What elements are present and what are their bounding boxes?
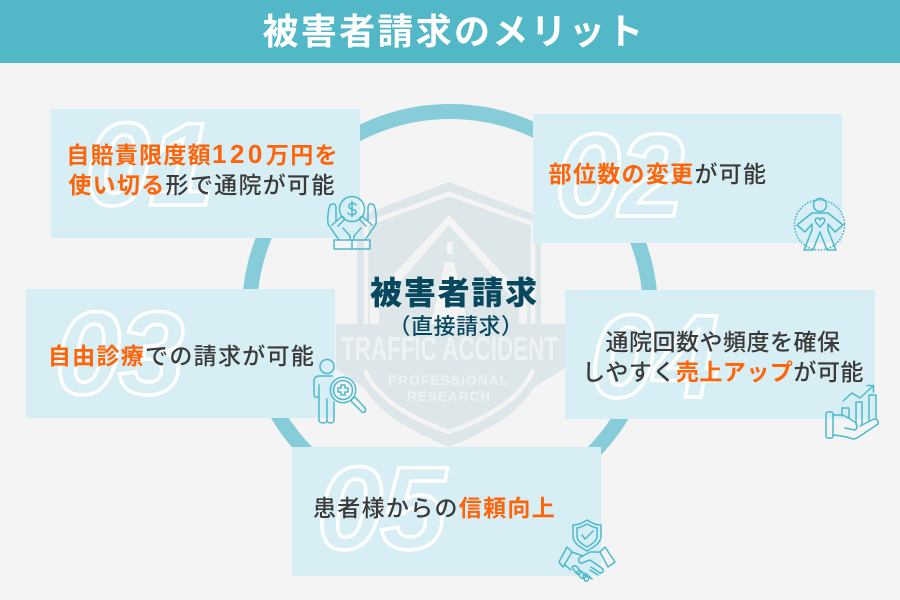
panel: merit 04 [565,290,875,423]
shield badge watermark [336,182,565,447]
badge text: PROFESSIONAL: PROFESSIONAL [388,373,508,388]
header band [0,0,900,63]
icon: hands holding coin [328,196,376,249]
badge text: TRAFFIC ACCIDENT: TRAFFIC ACCIDENT [341,330,558,367]
icon: handshake with shield [559,520,615,581]
icon: person with magnifier [314,360,366,423]
panel: merit 02 [533,110,842,243]
text: merit 02: 部位数の変更が可能 [549,161,767,187]
icon: body with heart [794,198,844,250]
number 04: 04 [590,291,718,423]
text: merit 04: しやすく売上アップが可能 [582,359,864,385]
title: 被害者請求のメリット [262,11,646,52]
panel: merit 01 [51,99,360,238]
number 03: 03 [55,288,184,420]
centre subheading: （直接請求） [388,314,524,339]
centre heading: 被害者請求 [370,275,539,311]
number 01: 01 [85,99,212,231]
text: merit 03: 自由診療での請求が可能 [48,343,315,369]
panel: merit 05 [292,443,601,576]
panel: merit 03 [26,288,335,420]
number 02: 02 [555,110,684,242]
text: merit 05: 患者様からの信頼向上 [313,495,556,521]
text: merit 01: 使い切る形で通院が可能 [68,172,336,198]
number 05: 05 [317,443,449,575]
badge text: RESEARCH: RESEARCH [407,389,490,404]
text: merit 01: 自賠責限度額120万円を [66,139,339,169]
ring [250,112,650,512]
text: merit 04: 通院回数や頻度を確保 [606,329,840,355]
icon: hand with growth chart [826,386,878,439]
